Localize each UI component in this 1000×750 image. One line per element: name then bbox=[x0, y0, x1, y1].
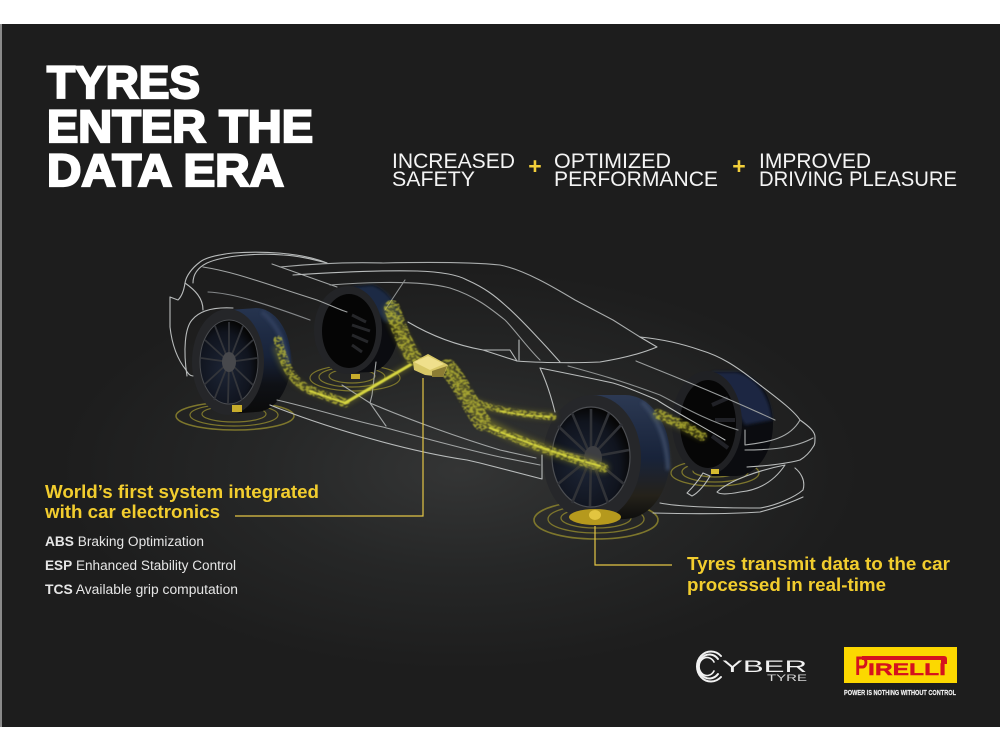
callout: car electronics bbox=[44, 482, 319, 522]
title bbox=[47, 57, 313, 196]
sensor rings: rear wheels bbox=[176, 365, 400, 430]
tyre: near rear with spoked wheel bbox=[192, 308, 291, 415]
data streams: soft glow bbox=[276, 310, 702, 468]
callout: data transmission: processed in real-time bbox=[687, 575, 886, 595]
benefit: optimized performance: OPTIMIZED bbox=[554, 149, 671, 173]
title: ENTER THE bbox=[47, 101, 313, 152]
logo: Cyber Tyre bbox=[697, 652, 807, 684]
list: electronic systems bbox=[45, 534, 238, 597]
benefit: optimized performance: PERFORMANCE bbox=[554, 167, 718, 191]
benefit: increased safety: INCREASED bbox=[392, 149, 515, 173]
benefit: increased safety: SAFETY bbox=[392, 167, 475, 191]
benefit: increased safety bbox=[392, 149, 515, 191]
data streams: speckled particles bbox=[278, 308, 702, 468]
tyre: far front bbox=[672, 371, 773, 476]
plus sign: + bbox=[732, 153, 746, 179]
benefit: improved driving pleasure bbox=[759, 149, 957, 191]
car illustration bbox=[170, 252, 815, 539]
callout: data transmission: Tyres transmit data to the car bbox=[687, 554, 950, 574]
sensors on tyres bbox=[232, 374, 719, 525]
car outline wireframe bbox=[170, 252, 815, 514]
callout: data transmission bbox=[687, 554, 950, 595]
callout: car electronics: with car electronics bbox=[44, 502, 220, 522]
logo: Cyber Tyre: YBER bbox=[722, 658, 807, 676]
benefit: improved driving pleasure: IMPROVED bbox=[759, 149, 871, 173]
list: electronic systems: ESP Enhanced Stability Control bbox=[45, 558, 236, 573]
callout: car electronics: World’s first system integrated bbox=[45, 482, 319, 502]
ECU control unit bbox=[413, 354, 448, 377]
list: electronic systems: TCS Available grip computation bbox=[45, 582, 238, 597]
logo: Pirelli: POWER IS NOTHING WITHOUT CONTROL bbox=[844, 688, 956, 697]
logo: Pirelli: IRELLI bbox=[868, 661, 946, 679]
leader line: sensor to data caption bbox=[595, 526, 672, 565]
title: DATA ERA bbox=[47, 145, 284, 196]
benefit: improved driving pleasure: DRIVING PLEASURE bbox=[759, 167, 957, 191]
tyre: near front with spoked wheel bbox=[543, 395, 670, 521]
logo: Pirelli bbox=[844, 647, 957, 697]
list: electronic systems: ABS Braking Optimization bbox=[45, 534, 204, 549]
benefit: optimized performance bbox=[554, 149, 718, 191]
leader line: ECU to electronics caption bbox=[235, 378, 423, 516]
logo: Pirelli: P bbox=[855, 651, 868, 681]
logo: Cyber Tyre: TYRE bbox=[767, 673, 807, 684]
title: TYRES bbox=[47, 57, 200, 108]
benefits row bbox=[392, 149, 957, 191]
plus sign: + bbox=[528, 153, 542, 179]
sensor rings: front wheels bbox=[534, 460, 759, 539]
tyre: far rear bbox=[314, 285, 402, 374]
data streams: bright core bbox=[310, 365, 600, 466]
